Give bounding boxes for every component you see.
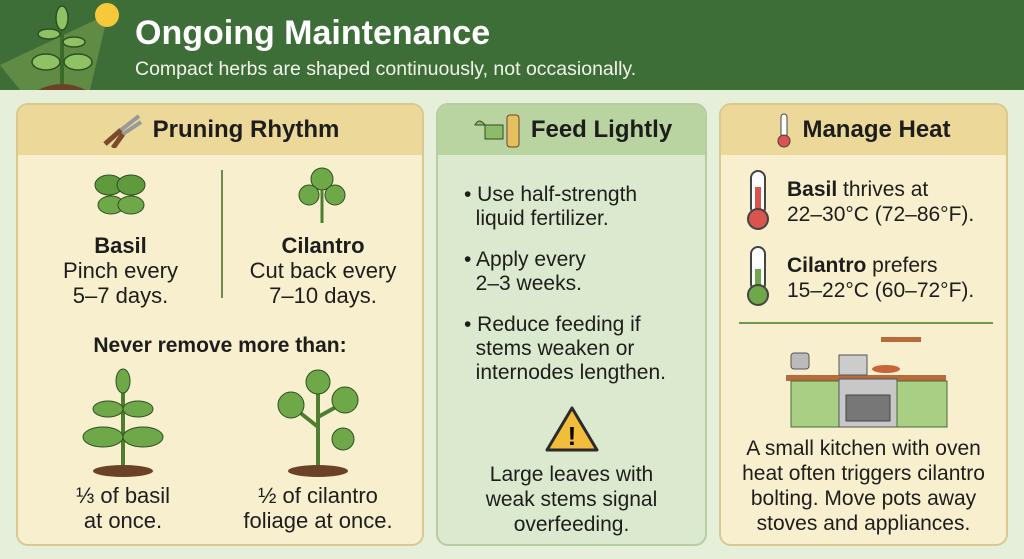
panel: pruning rhythm (16, 103, 424, 546)
list: feeding tips: internodes lengthen. (476, 361, 666, 384)
heading: manage heat (721, 105, 1006, 155)
icon: cilantro (298, 168, 346, 223)
list: feeding tips: 2–3 weeks. (476, 272, 582, 295)
text: overfeeding: Large leaves with (490, 463, 653, 486)
text: basil: Basil (94, 233, 147, 258)
text: kitchen note: bolting. Move pots away (751, 487, 976, 510)
heading: pruning rhythm: Pruning Rhythm (153, 116, 339, 143)
text: one half: ½ of cilantro (258, 483, 378, 508)
icon: basil plant (82, 368, 164, 477)
text: cilantro temp: Cilantro prefers (787, 254, 938, 277)
icon: warning (546, 406, 599, 452)
text: one third: ⅓ of basil (76, 483, 170, 508)
text: one third (76, 483, 170, 533)
panel: feed lightly (436, 103, 707, 546)
text: cilantro: Cilantro (281, 233, 365, 258)
list: feeding tips: • Apply every (464, 248, 586, 271)
icon: green thermometer (747, 246, 769, 306)
header (0, 0, 1024, 90)
subtitle: Compact herbs are shaped continuously, not occasionally. (135, 58, 636, 80)
text: overfeeding: weak stems signal (486, 488, 657, 511)
heading: feed lightly (438, 105, 705, 155)
text: basil: 5–7 days. (73, 283, 168, 308)
heading: pruning rhythm (18, 105, 422, 155)
text: never remove: Never remove more than: (93, 334, 347, 357)
text: cilantro (250, 233, 396, 308)
text: basil: Pinch every (63, 258, 178, 283)
list: feeding tips: • Reduce feeding if (464, 313, 641, 336)
text: kitchen note: heat often triggers cilantro (742, 462, 985, 485)
icon: basil (94, 174, 146, 214)
text: kitchen note: stoves and appliances. (757, 512, 970, 535)
text: one third: at once. (84, 508, 162, 533)
text: basil temp: 22–30°C (72–86°F). (787, 203, 974, 226)
title: Ongoing Maintenance (135, 14, 490, 52)
text: overfeeding (486, 463, 657, 536)
text: basil temp: Basil thrives at (787, 178, 928, 201)
text: kitchen note: A small kitchen with oven (746, 437, 981, 460)
text: overfeeding: overfeeding. (514, 513, 629, 536)
icon: warning: ! (568, 421, 576, 451)
text: basil temp (787, 178, 974, 226)
list: feeding tips (464, 183, 666, 384)
panel: manage heat (719, 103, 1008, 546)
text: basil (63, 233, 178, 308)
icon: cilantro plant (278, 370, 358, 477)
text: cilantro: 7–10 days. (269, 283, 377, 308)
icon: plant with sun (0, 3, 119, 90)
icon: red thermometer (747, 170, 769, 230)
heading: manage heat: Manage Heat (802, 116, 951, 143)
list: feeding tips: • Use half-strength (464, 183, 637, 206)
heading: feed lightly: Feed Lightly (531, 116, 672, 143)
text: cilantro: Cut back every (250, 258, 396, 283)
list: feeding tips: liquid fertilizer. (476, 207, 609, 230)
text: cilantro temp: 15–22°C (60–72°F). (787, 279, 974, 302)
text: kitchen note (742, 437, 985, 535)
list: feeding tips: stems weaken or (476, 337, 634, 360)
text: one half: foliage at once. (243, 508, 393, 533)
icon: kitchen (786, 337, 948, 428)
text: one half (243, 483, 393, 533)
text: cilantro temp (787, 254, 974, 302)
